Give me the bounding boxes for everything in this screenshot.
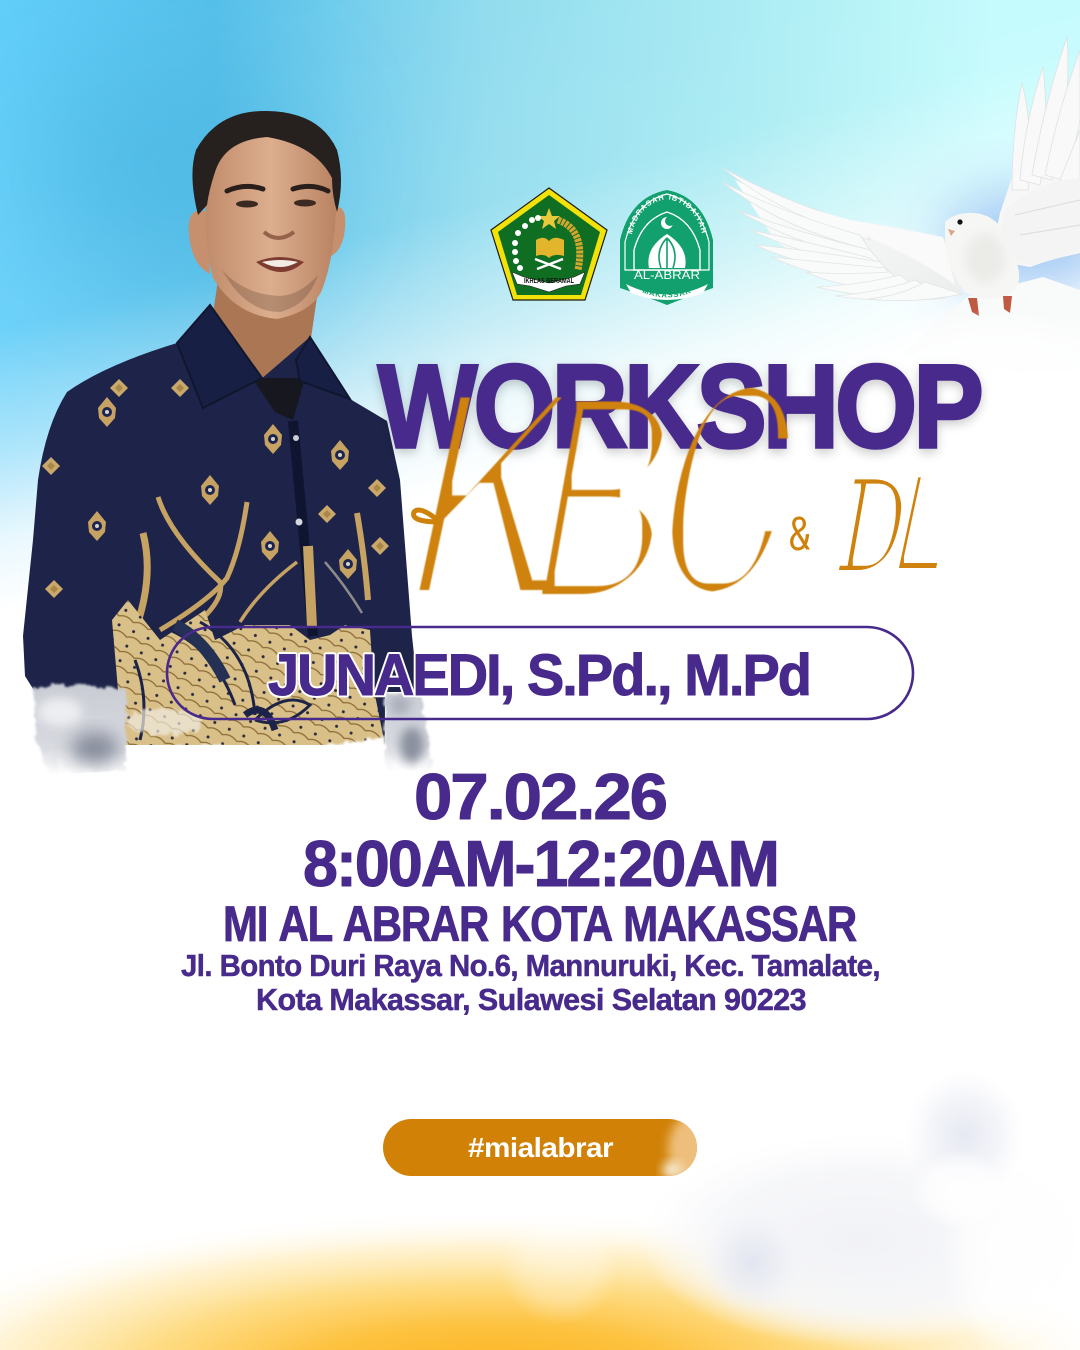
sleeve shading [38,695,424,764]
ampersand: & [788,512,811,558]
letters D L [827,457,969,597]
hashtag pill [383,1119,697,1176]
dove tail [903,277,1080,375]
dove left wing [722,168,963,301]
venue: MI AL ABRAR KOTA MAKASSAR [223,896,857,952]
dove body [945,213,1019,299]
icon: Kementerian Agama logo: IKHLAS BERAMAL [524,278,575,285]
ribbon [512,272,585,292]
mouth [256,257,304,272]
hair [192,111,341,215]
AL-ABRAR wordmark: AL-ABRAR [634,270,700,282]
icon: MI Al-Abrar logo: MADRASAH IBTIDAIYAH [627,194,707,234]
ears [189,207,345,274]
eyes [236,200,258,208]
t-shirt [252,378,305,420]
subtitle: and DL script [788,457,969,597]
stubble [222,270,318,312]
collar [177,305,350,408]
navy batik swirl [135,622,310,740]
nose [264,232,294,238]
person: speaker portrait [20,111,450,810]
date: 07.02.26 [414,760,666,833]
cloud under dove [830,310,1080,440]
star [538,208,560,229]
shirt motifs [42,379,389,598]
cloud covering lower shirt [20,709,450,810]
hashtag: #mialabrar [468,1132,614,1163]
subtitle: KBC script [377,348,828,652]
badge body [620,190,713,305]
speaker name pill: JUNAEDI, S.Pd., M.Pd [268,643,810,708]
dove feet [968,296,1012,316]
face [205,132,336,319]
letters D L: L [881,457,969,595]
open book [536,238,564,258]
placket [293,421,313,636]
background: sky gradient [0,0,1080,585]
rice branch [558,220,580,270]
MAKASSAR ribbon [626,284,708,300]
letters D L: D [827,459,920,597]
title: WORKSHOP: WORKSHOP [378,341,980,473]
inner arch [634,212,700,270]
pill outline [167,627,913,719]
dove right wing [990,37,1080,267]
letters K B C: B [506,356,705,652]
time: 8:00AM-12:20AM [303,827,778,900]
gold batik band [112,600,385,745]
dove eye and beak [957,219,963,225]
eyebrows [227,186,328,191]
letters K B C [377,348,828,652]
speaker name: JUNAEDI, S.Pd., M.Pd [268,643,810,708]
background: bottom yellow glow and clouds [0,1070,1080,1350]
letters K B C: C [629,348,828,644]
curved label [630,199,704,262]
icon: Kementerian Agama logo [491,188,607,300]
dome and crescent [648,234,686,268]
gold batik leaves [133,497,368,636]
grey sleeve fade [33,684,434,775]
K loop flourish [414,510,440,522]
neck [212,280,318,385]
address line 1: Jl. Bonto Duri Raya No.6, Mannuruki, Kec. Tamalate, [181,948,880,983]
icon: MI Al-Abrar logo [620,190,713,305]
cotton branch [512,215,541,271]
event details [181,760,880,1017]
speaker name pill [167,627,913,719]
letters K B C: K [377,353,610,648]
pentagon shield [491,188,607,300]
batik shirt [23,305,418,745]
address line 2: Kota Makassar, Sulawesi Selatan 90223 [256,982,806,1017]
icon: white dove [722,37,1080,440]
icon: MI Al-Abrar logo: MAKASSAR [642,291,691,298]
